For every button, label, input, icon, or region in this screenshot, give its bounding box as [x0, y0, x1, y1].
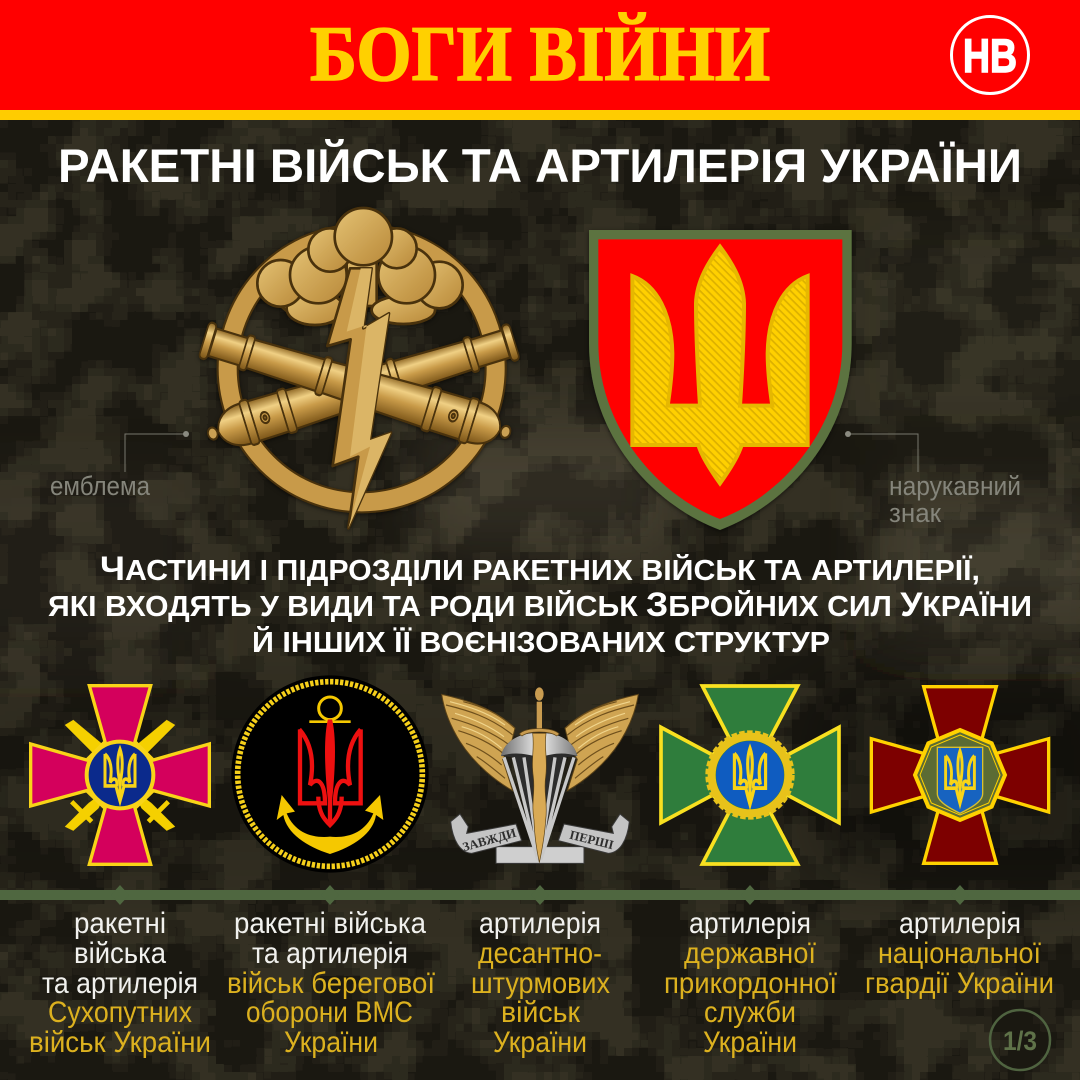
ribbon — [451, 814, 629, 863]
wings — [442, 694, 638, 791]
wreath — [709, 734, 791, 816]
shield red field — [598, 239, 842, 519]
title: БОГИ ВІЙНИ — [310, 10, 770, 97]
page number: 1/3 — [1003, 1026, 1037, 1056]
label: ground forces: Сухопутних — [48, 996, 192, 1029]
cross arms — [31, 686, 209, 864]
emblem ring — [228, 234, 496, 502]
shield border — [589, 230, 852, 530]
callout: емблема — [50, 431, 189, 501]
logo: НВ — [952, 16, 1028, 94]
label: border guard: України — [703, 1026, 797, 1059]
ribbon: ПЕРШІ — [568, 828, 615, 852]
rope ring — [238, 682, 422, 866]
label: ground forces: та артилерія — [42, 967, 198, 1000]
label: ground forces: ракетні — [74, 907, 166, 940]
label: air assault: штурмових — [471, 967, 610, 1000]
icon: gold emblem — [197, 208, 521, 528]
label: coastal defence — [227, 907, 436, 1059]
red trident — [299, 720, 361, 825]
octagon — [915, 730, 1005, 820]
icon: coastal defence badge — [231, 675, 429, 873]
cross arms — [661, 686, 839, 864]
label: coastal defence: та артилерія — [252, 937, 408, 970]
centre disc — [87, 742, 153, 808]
shield patch — [589, 230, 852, 530]
callout: нарукавний знак: нарукавний — [889, 471, 1021, 501]
icon: ground forces cross — [31, 686, 209, 864]
label: coastal defence: військ берегової — [227, 967, 436, 1000]
divider with markers — [0, 885, 1080, 905]
label: border guard — [664, 907, 838, 1059]
emblem lightning bolt — [327, 268, 391, 528]
trident — [946, 751, 974, 804]
anchor — [277, 697, 383, 854]
label: border guard: артилерія — [689, 907, 811, 940]
emblem cloud — [257, 208, 463, 325]
label: air assault: військ — [501, 996, 581, 1029]
black disc — [231, 675, 429, 873]
shield — [937, 747, 983, 813]
trident — [734, 748, 766, 805]
label: border guard: державної — [684, 937, 817, 970]
label: coastal defence: оборони ВМС — [246, 996, 413, 1029]
ribbon: ЗАВЖДИ — [461, 826, 518, 854]
section heading — [48, 550, 1032, 659]
icon: air assault badge — [442, 687, 638, 863]
sword — [519, 687, 559, 863]
label: national guard: гвардії України — [865, 967, 1054, 1000]
blue disc — [716, 741, 784, 809]
icon: border guard cross — [661, 686, 839, 864]
section heading: Й ІНШИХ ЇЇ ВОЄНІЗОВАНИХ СТРУКТУР — [252, 625, 830, 659]
parachute — [501, 733, 577, 862]
label: air assault: десантно- — [478, 937, 602, 970]
label: national guard: артилерія — [899, 907, 1021, 940]
label: border guard: служби — [704, 996, 796, 1029]
section heading: ЯКІ ВХОДЯТЬ У ВИДИ ТА РОДИ ВІЙСЬК ЗБРОЙНИХ СИЛ УКРАЇНИ — [48, 586, 1032, 624]
page number — [990, 1010, 1050, 1070]
label: ground forces: військ України — [29, 1026, 211, 1059]
label: air assault: України — [493, 1026, 587, 1059]
callout: емблема: емблема — [50, 471, 151, 501]
subtitle: РАКЕТНІ ВІЙСЬК ТА АРТИЛЕРІЯ УКРАЇНИ — [58, 139, 1022, 192]
cross arms — [871, 687, 1049, 863]
logo: НВ: НВ — [963, 29, 1017, 82]
label: ground forces: війська — [74, 937, 166, 970]
label: air assault: артилерія — [479, 907, 601, 940]
label: ground forces — [29, 907, 211, 1059]
callout: нарукавний знак: знак — [889, 498, 941, 528]
swords — [65, 720, 175, 831]
icon: national guard cross — [871, 687, 1049, 863]
label: national guard: національної — [878, 937, 1042, 970]
label: national guard — [865, 907, 1054, 1000]
header bar — [0, 0, 1080, 120]
label: coastal defence: України — [284, 1026, 378, 1059]
label: coastal defence: ракетні війська — [234, 907, 426, 940]
label: air assault — [471, 907, 610, 1059]
callout: нарукавний знак — [845, 431, 1021, 528]
label: border guard: прикордонної — [664, 967, 838, 1000]
emblem cannons — [197, 318, 521, 457]
trident — [632, 247, 808, 483]
trident — [105, 749, 135, 801]
section heading: ЧАСТИНИ І ПІДРОЗДІЛИ РАКЕТНИХ ВІЙСЬК ТА АРТИЛЕРІЇ, — [100, 550, 980, 588]
